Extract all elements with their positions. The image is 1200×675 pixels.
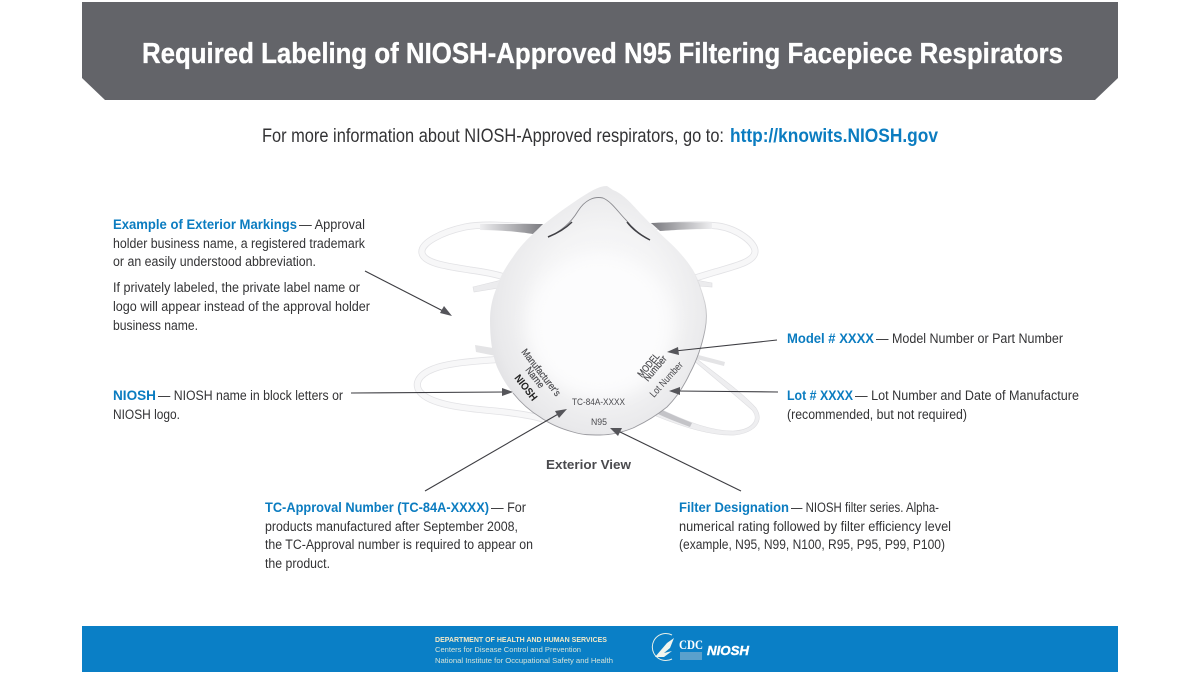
- printed labels on mask: TC-84A-XXXX: [572, 397, 626, 408]
- text: lot number: — Lot Number and Date of Manufacture: [855, 388, 1079, 403]
- printed labels on mask: Lot Number: [648, 360, 686, 400]
- footer bar: [82, 626, 1118, 672]
- text: TC-approval number: the product.: [265, 556, 330, 571]
- NIOSH logo: NIOSH: [707, 643, 750, 658]
- text: filter designation: numerical rating followed by filter efficiency level: [679, 519, 951, 534]
- text: NIOSH: — NIOSH name in block letters or: [158, 388, 343, 403]
- text: lot number: (recommended, but not required): [787, 407, 967, 422]
- arrow: lot number: [669, 387, 778, 395]
- text: filter designation: [679, 500, 951, 552]
- subtitle with link: http://knowits.NIOSH.gov: [730, 126, 938, 147]
- text: TC-approval number: the TC-Approval number is required to appear on: [265, 537, 533, 552]
- caption: exterior view: Exterior View: [546, 457, 632, 472]
- straps: [417, 222, 759, 435]
- title: Required Labeling of NIOSH-Approved N95 Filtering Facepiece Respirators: [142, 38, 1063, 70]
- text: TC-approval number: TC-Approval Number (TC-84A-XXXX): [265, 500, 489, 515]
- printed labels on mask: N95: [591, 417, 607, 428]
- arrow: exterior markings: [365, 271, 452, 316]
- text: filter designation: Filter Designation: [679, 500, 789, 515]
- printed labels on mask: [512, 347, 686, 428]
- text: example of exterior markings: If privately labeled, the private label name or: [113, 280, 360, 295]
- arrow: model number: [667, 340, 777, 355]
- text: example of exterior markings: logo will appear instead of the approval holder: [113, 299, 370, 314]
- text: TC-approval number: products manufactured after September 2008,: [265, 519, 518, 534]
- footer agency text: [435, 635, 613, 665]
- subtitle with link: For more information about NIOSH-Approved respirators, go to:: [262, 126, 724, 147]
- text: NIOSH: NIOSH logo.: [113, 407, 180, 422]
- printed labels on mask: Manufacturer's: [519, 347, 562, 399]
- footer agency text: National Institute for Occupational Safety and Health: [435, 656, 613, 665]
- printed labels on mask: MODEL: [636, 351, 663, 380]
- printed labels on mask: Number: [642, 353, 670, 384]
- CDC logo: CDC: [679, 637, 703, 652]
- icon: HHS emblem: [652, 634, 674, 660]
- nose wire: [548, 198, 650, 240]
- text: TC-approval number: [265, 500, 533, 571]
- mask lower edge: [513, 373, 690, 435]
- text: NIOSH: [113, 388, 343, 422]
- mask right edge: [690, 270, 706, 373]
- title banner: [82, 2, 1118, 100]
- text: TC-approval number: — For: [491, 500, 526, 515]
- text: model number: [787, 331, 1063, 346]
- text: lot number: Lot # XXXX: [787, 388, 853, 403]
- text: example of exterior markings: business name.: [113, 318, 198, 333]
- text: example of exterior markings: or an easily understood abbreviation.: [113, 254, 316, 269]
- printed labels on mask: Name: [523, 365, 546, 391]
- text: model number: — Model Number or Part Number: [876, 331, 1063, 346]
- respirator illustration: [417, 186, 759, 435]
- footer agency text: DEPARTMENT OF HEALTH AND HUMAN SERVICES: [435, 635, 607, 644]
- arrow: TC-approval: [425, 409, 567, 491]
- text: NIOSH: NIOSH: [113, 388, 156, 403]
- text: model number: Model # XXXX: [787, 331, 874, 346]
- text: lot number: [787, 388, 1079, 422]
- CDC logo: [679, 637, 703, 660]
- text: filter designation: (example, N95, N99, N100, R95, P95, P99, P100): [679, 537, 945, 552]
- printed labels on mask: NIOSH: [512, 372, 540, 403]
- text: filter designation: — NIOSH filter series. Alpha-: [791, 500, 939, 515]
- text: example of exterior markings: — Approval: [299, 217, 365, 232]
- arrow: filter designation: [610, 428, 741, 491]
- arrow: NIOSH: [351, 388, 513, 396]
- footer agency text: Centers for Disease Control and Prevention: [435, 645, 581, 654]
- mask body: [490, 186, 706, 435]
- text: example of exterior markings: [113, 217, 370, 333]
- text: example of exterior markings: holder business name, a registered trademark: [113, 236, 365, 251]
- text: example of exterior markings: Example of Exterior Markings: [113, 217, 297, 232]
